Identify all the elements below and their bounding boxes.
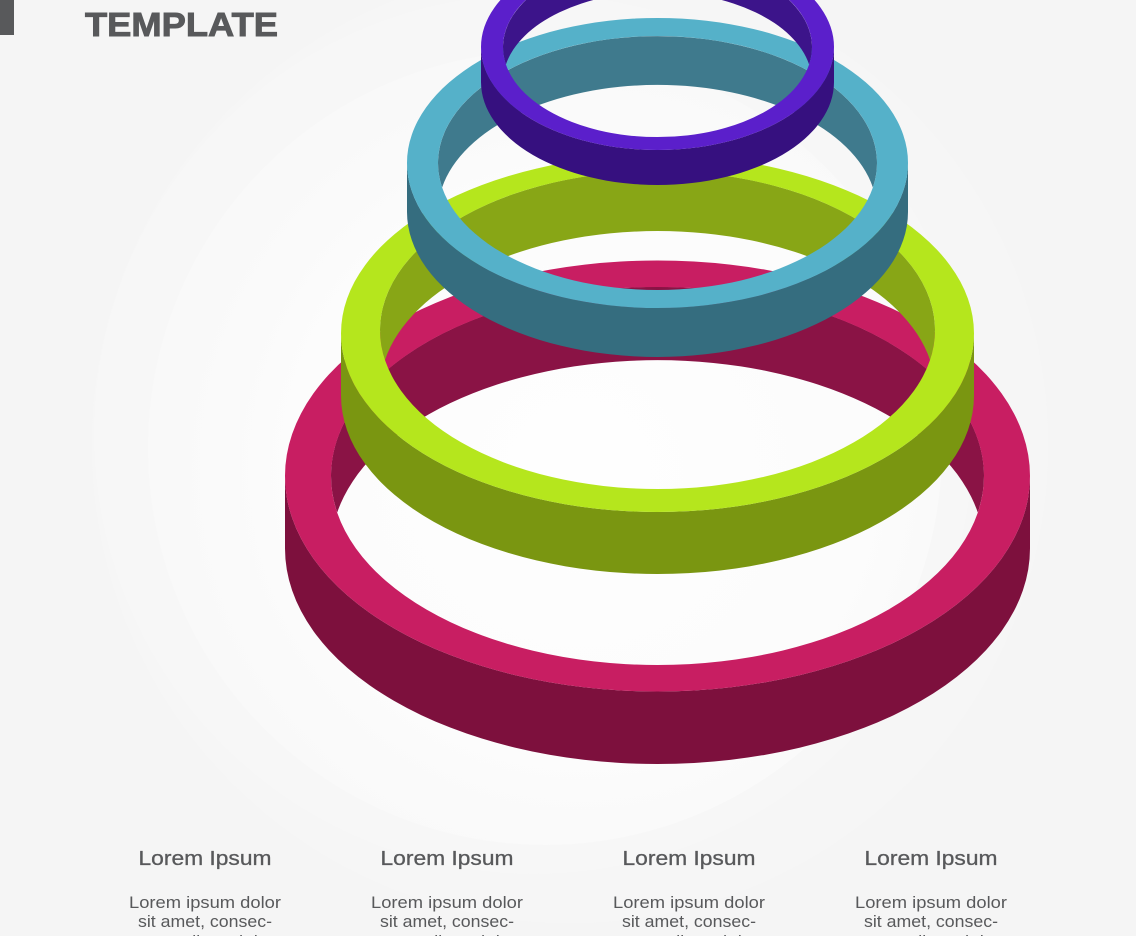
column 2 text	[371, 848, 524, 936]
title: TEMPLATE	[85, 7, 278, 44]
column 4 text: Lorem Ipsum	[864, 848, 998, 870]
column 4 text: sit amet, consec-	[864, 913, 998, 931]
column 3 text: sit amet, consec-	[622, 913, 756, 931]
column 2 text: Lorem ipsum dolor	[371, 894, 524, 912]
column 3 text: Lorem Ipsum	[622, 848, 756, 870]
ring 3: lime green ring	[341, 155, 974, 574]
column 2 text: Lorem Ipsum	[380, 848, 514, 870]
ring 1: purple top ring	[481, 0, 834, 185]
column 1 text	[129, 848, 282, 936]
column 2 text: sit amet, consec-	[380, 913, 514, 931]
ring 2: light blue ring	[407, 18, 908, 357]
ring 4: magenta base ring	[285, 260, 1030, 764]
column 1 text: Lorem ipsum dolor	[129, 894, 282, 912]
column 3 text: Lorem ipsum dolor	[613, 894, 766, 912]
column 4 text: Lorem ipsum dolor	[855, 894, 1008, 912]
column 4 text	[855, 848, 1008, 936]
column 3 text	[613, 848, 766, 936]
column 1 text: Lorem Ipsum	[138, 848, 272, 870]
header accent bar	[0, 0, 14, 35]
column 1 text: sit amet, consec-	[138, 913, 272, 931]
